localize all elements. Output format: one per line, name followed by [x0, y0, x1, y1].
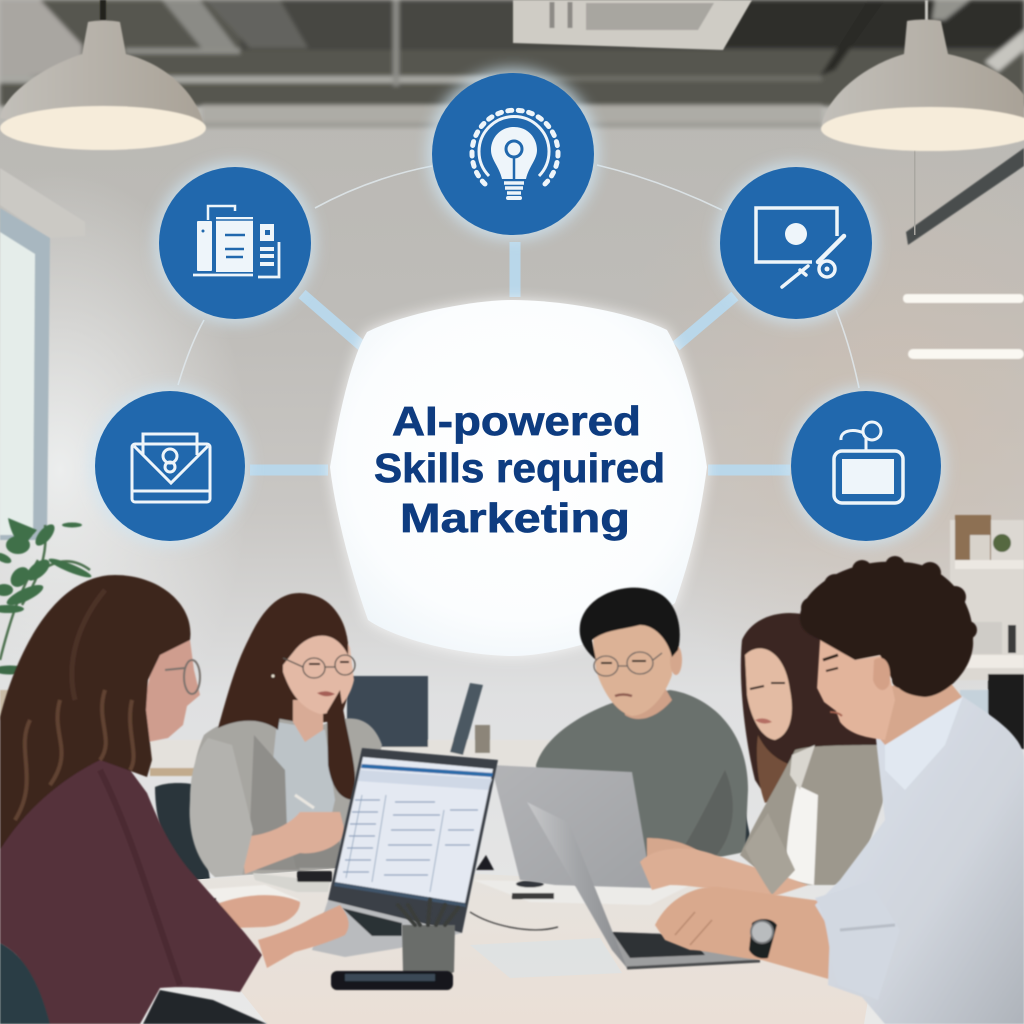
phone	[331, 971, 453, 990]
plant	[0, 518, 93, 674]
icon: lightbulb	[427, 68, 599, 240]
blazer	[190, 717, 382, 877]
chair front	[0, 943, 53, 1024]
face and neck	[293, 700, 323, 742]
title: Marketing	[400, 495, 630, 541]
neck and face	[860, 670, 962, 745]
icon: hanging tablet	[786, 386, 946, 546]
front laptop	[527, 802, 760, 969]
body	[0, 755, 262, 1024]
shirt	[815, 696, 1024, 1024]
left pendant lamp	[0, 0, 206, 150]
forearm	[655, 887, 850, 990]
person: man in grey sweater	[536, 588, 748, 870]
thick connectors to the hub	[250, 242, 790, 470]
person: man in blue shirt	[655, 556, 1024, 1024]
thin arcs between skill icons	[178, 165, 859, 388]
ceiling	[0, 0, 1024, 128]
forearm: woman in beige cardigan	[640, 813, 808, 897]
ceiling rail and light bars	[903, 148, 1024, 359]
window	[0, 168, 85, 540]
forearm and hand	[240, 812, 345, 874]
person: woman in beige cardigan	[740, 613, 887, 885]
curly hair	[800, 556, 977, 697]
title: AI-powered	[392, 398, 641, 444]
right pendant lamp	[821, 0, 1024, 151]
lamps	[0, 0, 1024, 151]
hand behind	[210, 895, 300, 928]
table	[190, 855, 868, 1024]
person: woman in grey blazer	[190, 593, 382, 877]
screen	[334, 757, 493, 907]
jeans	[143, 990, 267, 1024]
right shelf	[950, 515, 1024, 749]
icon: documents	[154, 162, 316, 324]
watch	[749, 919, 777, 959]
center laptop with spreadsheet	[312, 748, 498, 957]
papers and notebook	[195, 855, 690, 930]
glasses	[165, 660, 200, 694]
pen cup	[398, 900, 458, 977]
face	[145, 640, 200, 742]
back laptop	[491, 765, 652, 888]
icon: envelope	[90, 386, 250, 546]
background desk and monitors	[0, 676, 550, 776]
glasses	[283, 655, 355, 678]
front hair	[218, 596, 348, 730]
earring	[272, 674, 274, 678]
hair back	[222, 593, 350, 730]
title	[374, 398, 665, 541]
air-conditioning vent	[513, 0, 752, 50]
shirt	[272, 722, 335, 830]
hair	[0, 575, 190, 850]
person: woman in maroon shirt	[0, 575, 349, 1024]
diagram: AI-powered skills hub	[90, 68, 946, 656]
table reflection	[470, 938, 622, 978]
icon: monitor and pencil	[715, 162, 877, 324]
chairs	[155, 783, 752, 880]
title: Skills required	[374, 445, 665, 491]
arm and hand	[258, 905, 349, 968]
central hub panel	[330, 300, 707, 656]
